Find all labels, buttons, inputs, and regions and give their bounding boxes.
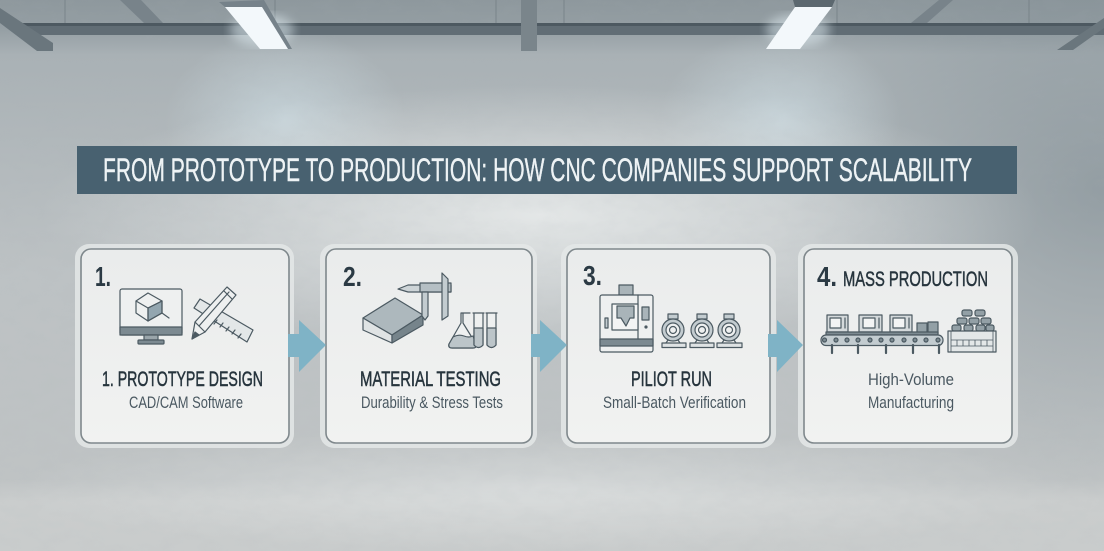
icon: conveyor line — [821, 315, 943, 353]
icon: material block — [363, 298, 423, 343]
arrow 2 to 3 — [531, 320, 567, 372]
panel: step 2 material testing — [320, 244, 537, 448]
ceiling beams — [0, 0, 1104, 51]
step 1 heading: 1. PROTOTYPE DESIGN — [102, 368, 263, 391]
step number 1: 1. — [95, 261, 111, 292]
arrow 3 to 4 — [768, 320, 803, 372]
step 2 heading: MATERIAL TESTING — [360, 368, 501, 391]
step number 3: 3. — [583, 260, 602, 291]
ceiling lamp left — [219, 0, 294, 49]
panel: step 4 mass production — [798, 244, 1018, 448]
arrow 1 to 2 — [288, 320, 326, 372]
title banner — [77, 146, 1017, 194]
icon: CNC machine — [600, 285, 653, 352]
step 4 heading: MASS PRODUCTION — [843, 268, 988, 291]
step number 4: 4. — [817, 261, 837, 292]
icon: caliper — [398, 273, 451, 320]
icon: crate of finished parts — [948, 310, 996, 352]
icon: pencil and ruler — [192, 287, 253, 342]
step 3 heading: PILIOT RUN — [631, 368, 712, 391]
step 1 subtitle: CAD/CAM Software — [129, 393, 243, 412]
icon: CAD monitor with cube — [120, 289, 182, 344]
step 3 subtitle: Small-Batch Verification — [603, 393, 746, 412]
step 2 subtitle: Durability & Stress Tests — [361, 393, 503, 412]
step number 2: 2. — [343, 261, 362, 292]
panel: step 1 prototype design — [75, 244, 294, 448]
step 4 subtitle line 1: High-Volume — [868, 370, 954, 389]
step 4 subtitle line 2: Manufacturing — [868, 393, 954, 412]
icon: pump parts — [662, 314, 742, 348]
ceiling lamp right — [766, 0, 835, 49]
panel: step 3 pilot run — [561, 244, 776, 448]
icon: flask and test tubes — [449, 313, 497, 348]
